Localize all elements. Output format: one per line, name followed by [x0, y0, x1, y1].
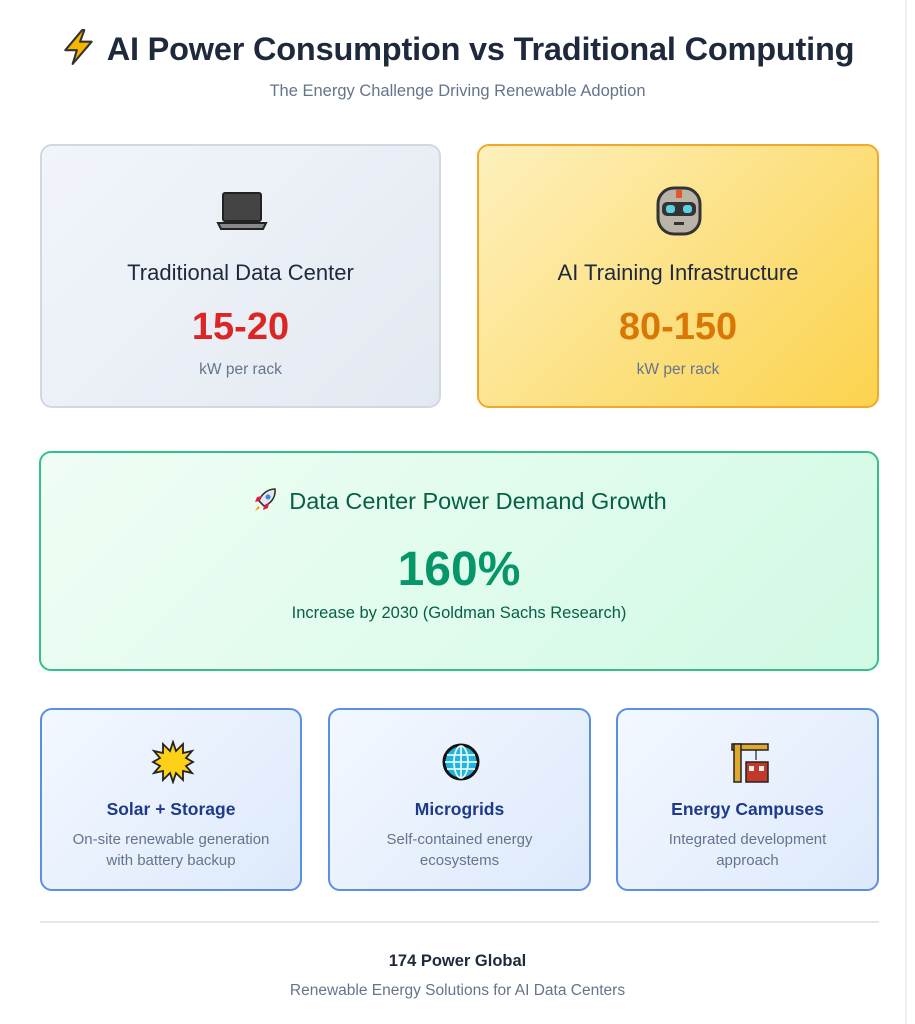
heading: AI Training Infrastructure — [558, 260, 798, 285]
icon: robot — [656, 186, 702, 236]
heading: Solar + Storage — [107, 799, 235, 819]
icon: rocket — [255, 488, 276, 511]
title: AI Power Consumption vs Traditional Computing — [107, 31, 854, 67]
description — [387, 831, 532, 869]
footer tagline: Renewable Energy Solutions for AI Data Centers — [290, 982, 625, 999]
panel: traditional data center — [40, 144, 441, 408]
heading: Data Center Power Demand Growth — [289, 488, 667, 514]
description: with battery backup — [106, 852, 236, 869]
description: Self-contained energy — [387, 831, 532, 848]
footer brand: 174 Power Global — [389, 952, 526, 970]
description: ecosystems — [420, 852, 499, 869]
subtitle: The Energy Challenge Driving Renewable Adoption — [269, 82, 646, 100]
heading: Energy Campuses — [671, 799, 824, 819]
panel: energy campuses — [616, 708, 879, 891]
description: Integrated development — [669, 831, 826, 848]
panel: power demand growth — [39, 451, 879, 671]
unit: kW per rack — [199, 361, 282, 378]
description: approach — [716, 852, 779, 869]
unit: kW per rack — [637, 361, 719, 378]
heading: Microgrids — [415, 799, 504, 819]
icon: sun — [151, 740, 195, 784]
panel: AI training infrastructure — [477, 144, 879, 408]
icon: lightning — [64, 29, 93, 65]
value: 160% — [398, 543, 520, 596]
description — [73, 831, 269, 869]
description — [669, 831, 826, 869]
icon: laptop — [216, 192, 268, 230]
caption: Increase by 2030 (Goldman Sachs Research) — [292, 604, 626, 622]
value: 15-20 — [192, 306, 289, 348]
heading: Traditional Data Center — [127, 260, 354, 285]
panel: microgrids — [328, 708, 591, 891]
panel: solar + storage — [40, 708, 302, 891]
value: 80-150 — [619, 306, 737, 348]
icon: globe — [442, 744, 480, 780]
description: On-site renewable generation — [73, 831, 269, 848]
icon: construction crane — [731, 743, 769, 783]
